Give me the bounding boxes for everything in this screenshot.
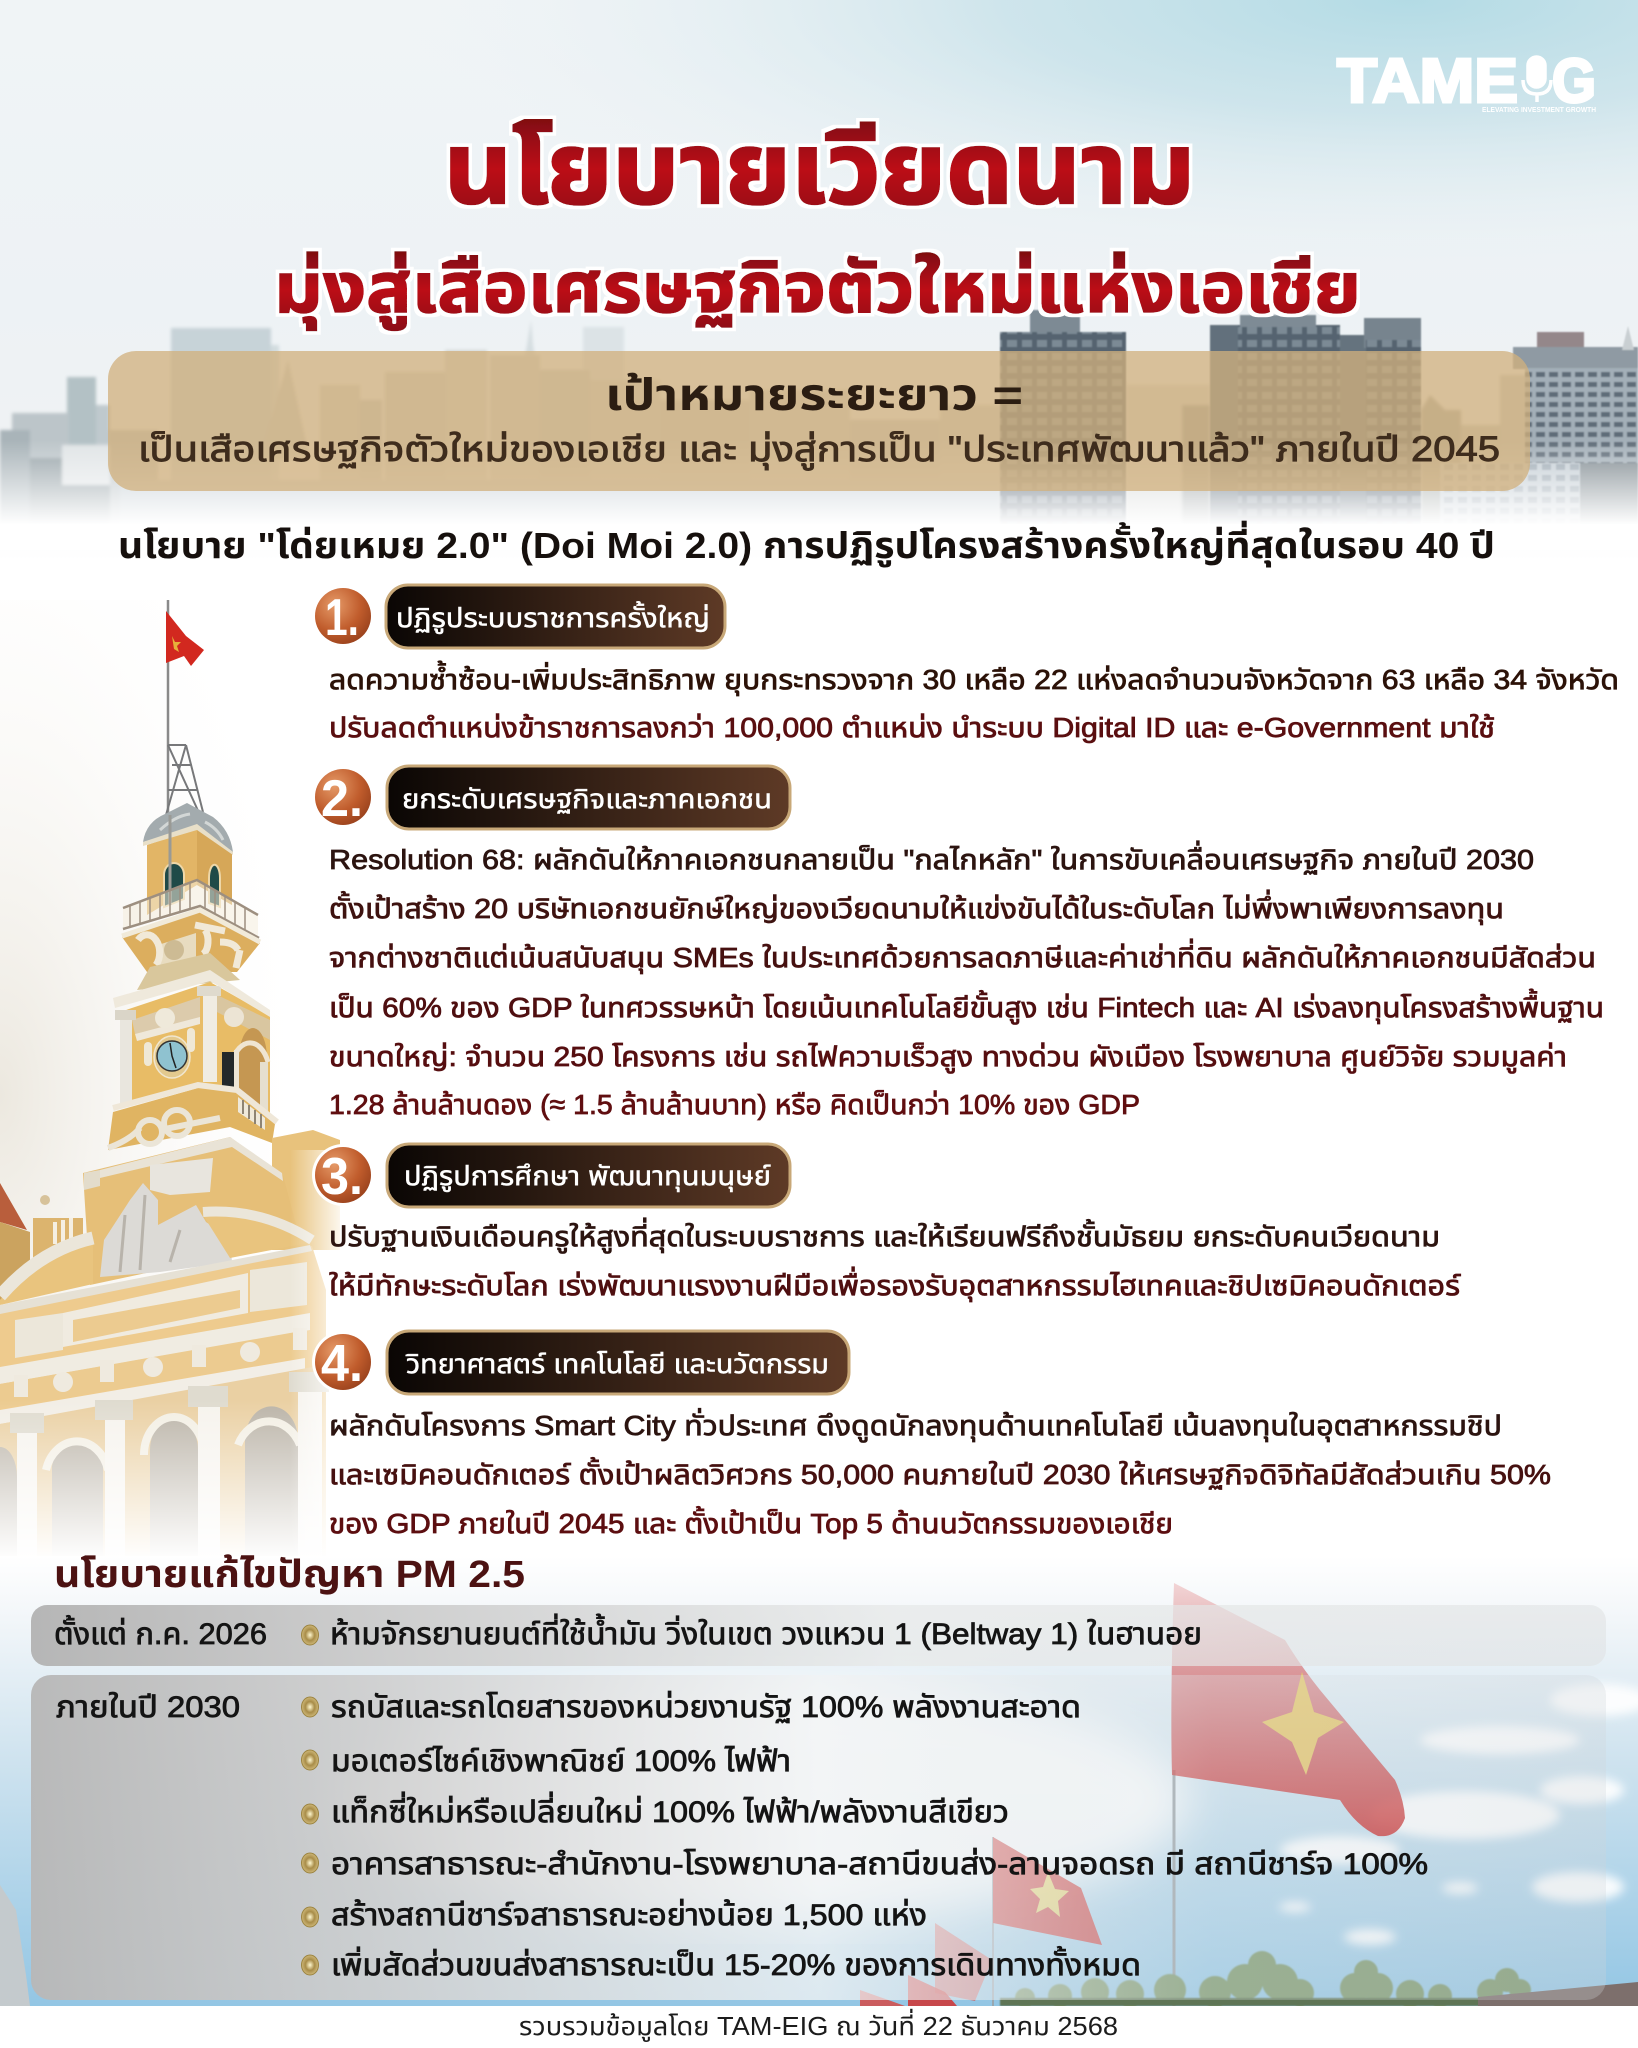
big flag (1171, 1583, 1405, 2006)
sloped base (137, 953, 240, 990)
clock (154, 1036, 190, 1078)
pole front of block (168, 815, 172, 905)
item 1: รถบัสและรถโดยสารของหน่วยงานรัฐ 100% พลังงานสะอาด (331, 1691, 1081, 1724)
goal heading: เป้าหมายระยะยาว = (605, 371, 1023, 420)
trees (1000, 1951, 1531, 2008)
panel: long-term goal (108, 351, 1530, 491)
statue left (0, 1885, 30, 2006)
body text 1 (329, 660, 1619, 743)
pediment (0, 1238, 93, 1305)
logo: TAME-EIG (1337, 47, 1596, 116)
body text 2: 1.28 ล้านล้านดอง (≈ 1.5 ล้านล้านบาท) หรือ คิดเป็นกว่า 10% ของ GDP (329, 1089, 1140, 1120)
clock body (120, 982, 270, 1116)
body text 4: ของ GDP ภายในปี 2045 และ ตั้งเป้าเป็น Top 5 ด้านนวัตกรรมของเอเชีย (329, 1506, 1173, 1539)
dome (143, 803, 233, 852)
skyline background (0, 310, 1638, 550)
body text 4: และเซมิคอนดักเตอร์ ตั้งเป้าผลิตวิศวกร 50,000 คนภายในปี 2030 ให้เศรษฐกิจดิจิทัลมีสัดส่วนเกิน 50% (329, 1457, 1551, 1490)
logo: TAME-EIG: TAME (1337, 47, 1518, 116)
background: foggy sky (0, 0, 1638, 560)
right arch (239, 1028, 267, 1112)
heading: Doi Moi 2.0: นโยบาย "โด่ยเหมย 2.0" (Doi Moi 2.0) การปฏิรูปโครงสร้างครั้งใหญ่ที่สุดในรอบ 40 ปี (118, 520, 1495, 567)
pill heading 4: วิทยาศาสตร์ เทคโนโลยี และนวัตกรรม (406, 1349, 829, 1379)
body text 3: ปรับฐานเงินเดือนครูให้สูงที่สุดในระบบราชการ และให้เรียนฟรีถึงชั้นมัธยม ยกระดับคนเวียดนาม (329, 1217, 1440, 1254)
title: นโยบายเวียดนาม (444, 113, 1195, 225)
body text 4 (329, 1408, 1551, 1539)
number badge 1: 1. (325, 589, 359, 647)
pill heading 2 (387, 766, 790, 829)
cornice (113, 970, 270, 1017)
balcony underside (122, 912, 260, 972)
goal text: เป็นเสือเศรษฐกิจตัวใหม่ของเอเชีย และ มุ่งสู่การเป็น "ประเทศพัฒนาแล้ว" ภายในปี 2045 (138, 430, 1500, 470)
label: ตั้งแต่ ก.ค. 2026 (54, 1615, 267, 1651)
number badge 2: 2. (321, 770, 363, 828)
balcony (123, 880, 258, 937)
body text 2: เป็น 60% ของ GDP ในทศวรรษหน้า โดยเน้นเทคโนโลยีขั้นสูง เช่น Fintech และ AI เร่งลงทุนโครงสร้างพื้นฐาน (329, 988, 1604, 1025)
illustration: Ho Chi Minh City Hall tower (0, 600, 420, 1560)
section 2 (312, 766, 1604, 1120)
logo: TAME-EIG: G (1552, 47, 1596, 116)
scroll ornament (108, 1118, 220, 1148)
frieze panel (63, 1273, 248, 1347)
footer source: รวบรวมข้อมูลโดย TAM-EIG ณ วันที่ 22 ธันวาคม 2568 (519, 2008, 1118, 2042)
entablature (0, 1313, 310, 1384)
section 4 (312, 1331, 1551, 1539)
pill heading 3: ปฏิรูปการศึกษา พัฒนาทุนมนุษย์ (404, 1161, 771, 1192)
body text 2 (329, 840, 1604, 1120)
tower base (108, 1088, 275, 1150)
body text 1: ลดความซ้ำซ้อน-เพิ่มประสิทธิภาพ ยุบกระทรวงจาก 30 เหลือ 22 แห่งลดจำนวนจังหวัดจาก 63 เหลือ 34 จังหวัด (329, 660, 1619, 696)
arches (0, 1406, 298, 1560)
flag 3 (935, 1923, 992, 2001)
pill heading 4 (387, 1331, 849, 1394)
pill heading 3 (387, 1144, 790, 1207)
subtitle: มุ่งสู่เสือเศรษฐกิจตัวใหม่แห่งเอเชีย (274, 249, 1361, 330)
body text 2: ขนาดใหญ่: จำนวน 250 โครงการ เช่น รถไฟความเร็วสูง ทางด่วน ผังเมือง โรงพยาบาล ศูนย์วิจัย รวมมูลค่า (329, 1041, 1567, 1074)
item 5: สร้างสถานีชาร์จสาธารณะอย่างน้อย 1,500 แห่ง (331, 1899, 927, 1932)
pill heading 1: ปฏิรูประบบราชการครั้งใหญ่ (396, 601, 710, 634)
right wing (272, 1130, 340, 1250)
label: ภายในปี 2030 (56, 1691, 240, 1724)
body text 2: ตั้งเป้าสร้าง 20 บริษัทเอกชนยักษ์ใหญ่ของเวียดนามให้แข่งขันได้ในระดับโลก ไม่พึ่งพาเพียงการลงทุน (329, 889, 1504, 925)
item 4: อาคารสาธารณะ-สำนักงาน-โรงพยาบาล-สถานีขนส่ง-ลานจอดรถ มี สถานีชาร์จ 100% (331, 1848, 1428, 1881)
body text 1: ปรับลดตำแหน่งข้าราชการลงกว่า 100,000 ตำแหน่ง นำระบบ Digital ID และ e-Government มาใช้ (329, 712, 1495, 743)
number badge 4: 4. (321, 1335, 363, 1393)
body text 3 (329, 1217, 1461, 1302)
lattice mast (166, 745, 203, 815)
item 6: เพิ่มสัดส่วนขนส่งสาธารณะเป็น 15-20% ของการเดินทางทั้งหมด (331, 1946, 1141, 1982)
columns (10, 1372, 329, 1560)
columns (120, 1016, 132, 1104)
number badge 2 (312, 766, 374, 828)
panel: from July 2026 (31, 1605, 1606, 1666)
pill heading 2: ยกระดับเศรษฐกิจและภาคเอกชน (402, 784, 772, 814)
section 3 (312, 1144, 1461, 1302)
number badge 1 (312, 585, 374, 647)
logo: TAME-EIG: ELEVATING INVESTMENT GROWTH (1482, 107, 1596, 114)
item 2: มอเตอร์ไซค์เชิงพาณิชย์ 100% ไฟฟ้า (331, 1745, 791, 1778)
panel: by 2030 (31, 1675, 1606, 2000)
icon: microphone (1523, 57, 1551, 102)
facade (0, 1246, 326, 1560)
flag 2 (993, 1837, 1102, 2006)
number badge 3: 3. (321, 1148, 363, 1206)
number badge 4 (312, 1331, 374, 1393)
left roof (0, 1183, 27, 1230)
pill heading 1 (386, 585, 725, 648)
coat of arms and statues (150, 1158, 213, 1195)
body text 2: Resolution 68: ผลักดันให้ภาคเอกชนกลายเป็น "กลไกหลัก" ในการขับเคลื่อนเศรษฐกิจ ภายในปี 2030 (329, 840, 1534, 875)
rule text: ห้ามจักรยานยนต์ที่ใช้น้ำมัน วิ่งในเขต วงแหวน 1 (Beltway 1) ในฮานอย (330, 1613, 1202, 1651)
icon: gold bullet (302, 1625, 318, 1645)
body text 4: ผลักดันโครงการ Smart City ทั่วประเทศ ดึงดูดนักลงทุนด้านเทคโนโลยี เน้นลงทุนในอุตสาหกรรมชิป (329, 1408, 1502, 1443)
building (1478, 1982, 1638, 2006)
heading: PM 2.5 policy: นโยบายแก้ไขปัญหา PM 2.5 (54, 1554, 525, 1596)
background: sky with flags (0, 1556, 1638, 2048)
icon: flag on tower (166, 600, 204, 815)
body text 2: จากต่างชาติแต่เน้นสนับสนุน SMEs ในประเทศด้วยการลดภาษีและค่าเช่าที่ดิน ผลักดันให้ภาคเอกชนมีสัดส่วน (329, 938, 1596, 974)
number badge 3 (312, 1144, 374, 1206)
body text 3: ให้มีทักษะระดับโลก เร่งพัฒนาแรงงานฝีมือเพื่อรองรับอุตสาหกรรมไฮเทคและชิปเซมิคอนดักเตอร์ (329, 1266, 1461, 1302)
upper block (147, 828, 232, 915)
item 3: แท็กซี่ใหม่หรือเปลี่ยนใหม่ 100% ไฟฟ้า/พลังงานสีเขียว (331, 1791, 1009, 1829)
lower tower (83, 1137, 300, 1285)
section 1 (312, 585, 1619, 743)
